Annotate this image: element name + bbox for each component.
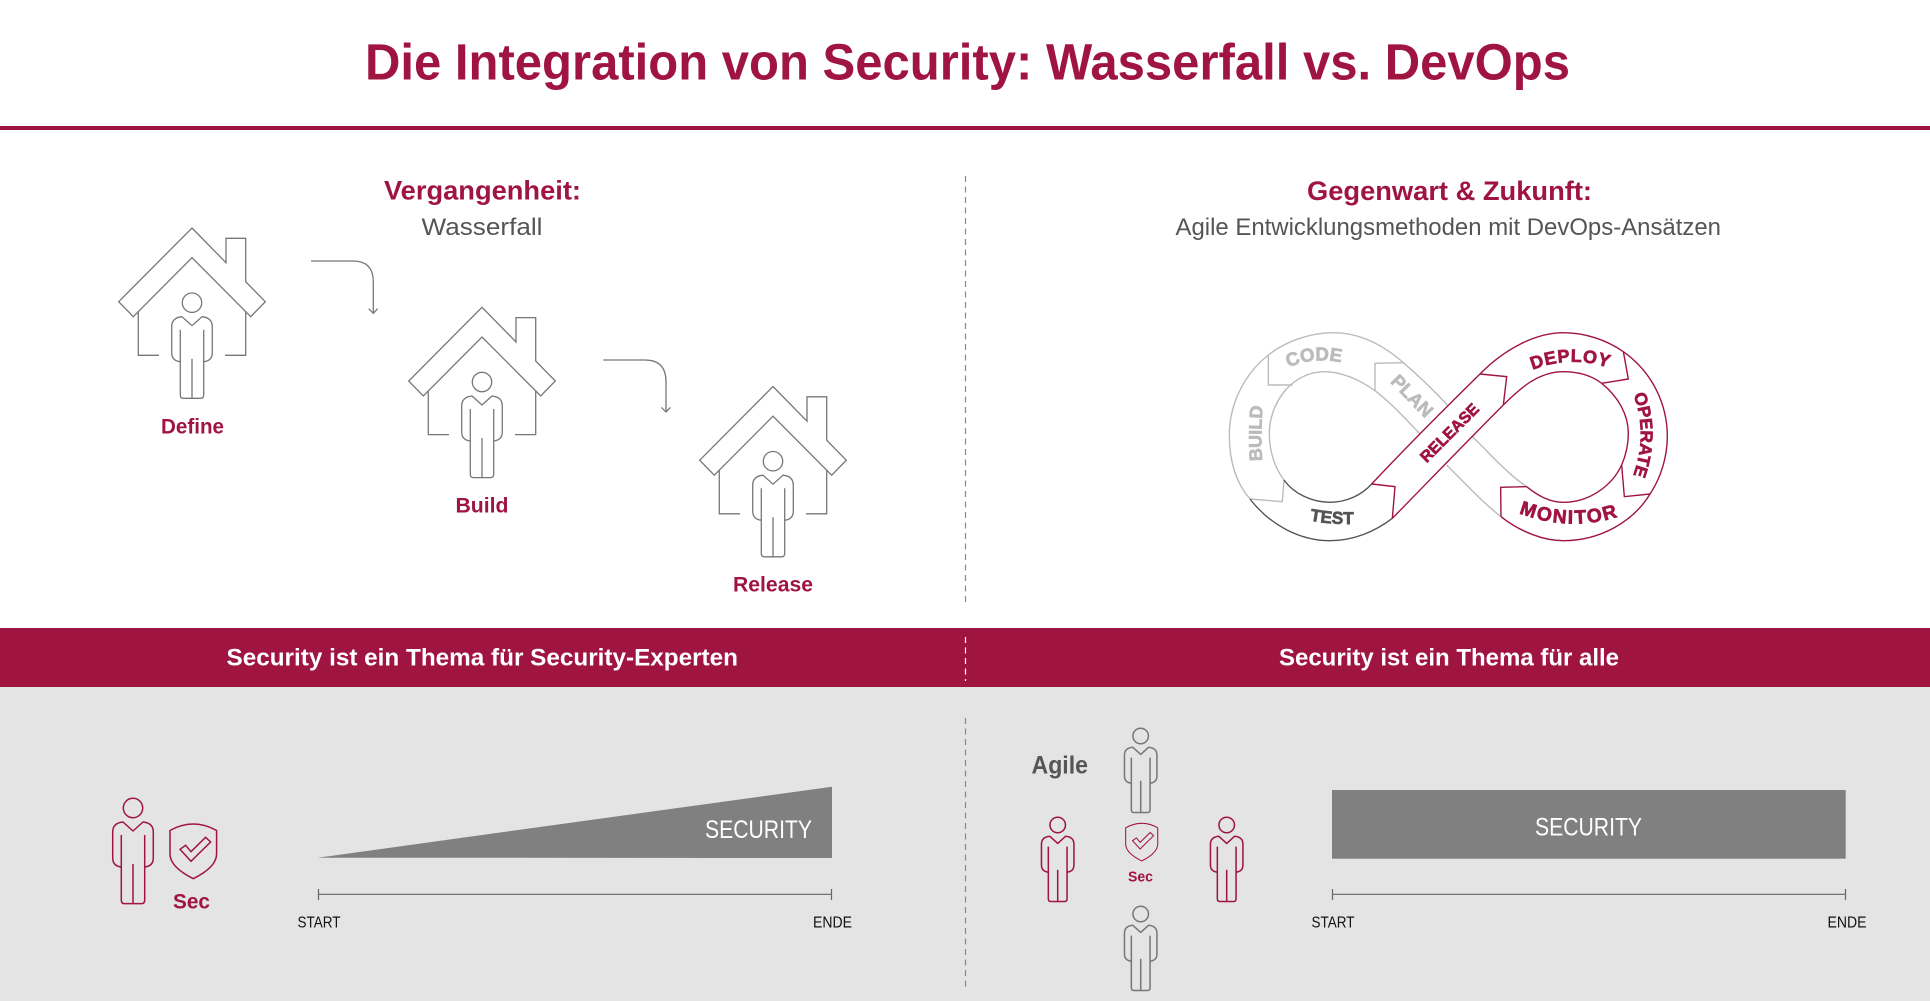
icon: house Release [700,386,846,557]
label: Define: Define [161,416,224,438]
loop segments: grey [1229,333,1527,517]
grey panel background [0,687,1930,1001]
divider bottom [964,718,966,991]
label: Sec small: Sec [1128,868,1153,886]
icon: small shield [1126,823,1158,861]
icon: house Define [119,228,265,398]
subheading: Agile Entwicklungsmethoden: Agile Entwicklungsmethoden mit DevOps-Ansätzen [1176,214,1721,241]
label: CODE: CODE [1286,347,1342,366]
label: Release: Release [733,574,813,596]
label: START left: START [298,914,341,932]
label: RELEASE: RELEASE [1419,402,1480,464]
heading: Gegenwart und Zukunft: Gegenwart & Zukunft: [1307,176,1592,206]
icon: security person [113,798,153,904]
arrow: Define to Build [311,261,378,313]
axis: timeline left [318,889,832,900]
panel: security experts [113,787,852,932]
chart: DevOps infinity loop [1228,332,1668,542]
axis: timeline right [1332,889,1846,900]
banner text left: Security ist ein Thema für Security-Experten [226,644,738,672]
label: ENDE right: ENDE [1828,914,1866,932]
label: Build: Build [456,494,508,518]
label: TEST: TEST [1311,508,1354,524]
icon: person top [1124,728,1157,812]
panel: Vergangenheit Wasserfall [119,176,846,596]
title: Die Integration von Security: Wasserfall vs. DevOps [365,34,1570,90]
icon: person bottom [1124,906,1157,990]
title rule [0,126,1930,130]
label: BUILD: BUILD [1248,406,1263,460]
arrow: Build to Release [603,360,670,412]
icon: shield [170,824,217,879]
label: MONITOR: MONITOR [1520,500,1618,524]
label: SECURITY bar: SECURITY [1535,814,1642,842]
divider top [964,176,966,603]
label: PLAN: PLAN [1390,374,1434,418]
subheading: Wasserfall: Wasserfall [422,214,542,241]
chart: security wedge [318,787,832,858]
icon: house Build [409,307,555,478]
label: SECURITY wedge: SECURITY [705,816,812,844]
icon: person left [1041,817,1074,901]
label: START right: START [1312,914,1355,932]
panel: Gegenwart und Zukunft [1176,176,1721,542]
label: Sec: Sec [173,890,210,914]
loop segments: red [1372,333,1667,541]
label: OPERATE: OPERATE [1633,392,1653,478]
panel: security for everyone [1032,728,1866,990]
chart: security bar [1332,790,1846,859]
loop segment: TEST [1250,480,1392,541]
label: Agile: Agile [1032,752,1088,780]
heading: Vergangenheit: Vergangenheit: [384,176,581,206]
banner text right: Security ist ein Thema für alle [1279,644,1619,672]
label: ENDE left: ENDE [813,914,852,932]
label: DEPLOY: DEPLOY [1529,349,1612,370]
banner divider [964,637,966,681]
icon: person right [1210,817,1243,901]
banner background [0,628,1930,687]
